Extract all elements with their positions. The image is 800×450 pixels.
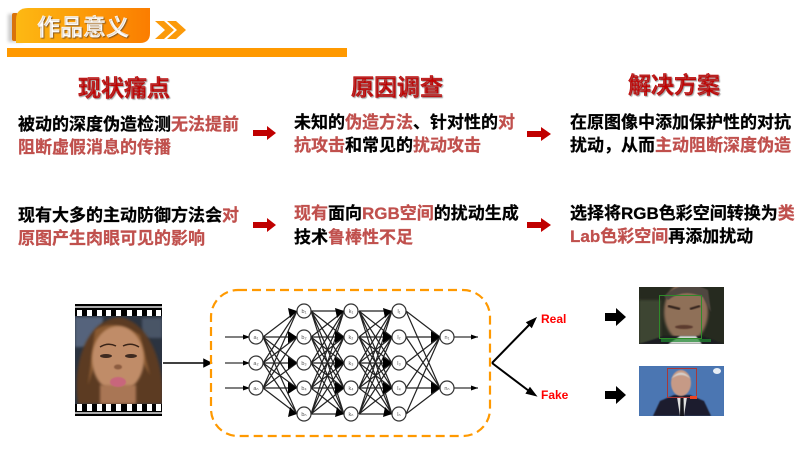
text: solution 2: 选择将RGB色彩空间转换为类 xyxy=(570,204,795,223)
text: solution 2: Lab色彩空间 xyxy=(570,226,668,246)
text: cause 2: 鲁棒性不足 xyxy=(328,227,413,247)
photo: real face with green box xyxy=(639,282,724,344)
neural network diagram: l₂ xyxy=(397,335,401,341)
neural network diagram: b₂ xyxy=(301,335,307,341)
heading: 现状痛点: 现状痛点 xyxy=(78,75,170,101)
neural network diagram: k₂ xyxy=(349,335,353,341)
text: solution 2: 再添加扰动 xyxy=(668,227,753,246)
neural network diagram: b₁ xyxy=(302,309,307,315)
arrow: row 1 left xyxy=(253,126,276,140)
arrow: row 2 right xyxy=(527,218,551,232)
neural network diagram: l₃ xyxy=(397,361,401,367)
text: cause 1: 和常见的扰动攻击 xyxy=(345,136,481,155)
text: pain point 2: 原图产生肉眼可见的影响 xyxy=(18,229,205,248)
text: cause 2: 现有面向RGB空间的扰动生成 xyxy=(294,204,519,223)
text: cause 2: 技术 xyxy=(294,228,328,247)
arrow: Real to photo xyxy=(605,308,626,326)
text: pain point 2: 现有大多的主动防御方法会对 xyxy=(18,206,239,225)
text: pain point 1: 被动的深度伪造检测无法提前 xyxy=(18,115,239,134)
neural network diagram xyxy=(225,304,478,421)
neural network diagram: bₙ xyxy=(301,412,307,418)
heading: 解决方案: 解决方案 xyxy=(628,72,720,98)
neural network diagram: b₄ xyxy=(301,386,307,392)
neural network diagram: kₙ xyxy=(349,412,354,418)
neural network diagram: l₁ xyxy=(397,309,401,315)
image: film strip with face xyxy=(75,304,163,416)
neural network diagram: l₄ xyxy=(397,386,401,392)
arrow: image to network xyxy=(163,360,211,366)
arrow: row 2 left xyxy=(253,218,276,232)
label: Fake: Fake xyxy=(541,388,569,402)
neural network diagram: aₙ xyxy=(253,386,259,392)
neural network diagram: a₁ xyxy=(254,335,259,341)
neural network diagram: k₁ xyxy=(349,309,353,315)
text: solution 1: 在原图像中添加保护性的对抗 xyxy=(570,113,791,132)
arrow: to Fake xyxy=(492,363,535,395)
section header: 作品意义: 作品意义 xyxy=(37,14,129,40)
photo: fake face with red box xyxy=(639,366,724,416)
neural network diagram: b₃ xyxy=(301,361,307,367)
neural network diagram: lₙ xyxy=(397,412,402,418)
text: solution 1: 扰动，从而 xyxy=(570,136,655,155)
neural network diagram: k₄ xyxy=(348,386,354,392)
section header: 作品意义 xyxy=(7,8,347,57)
text: solution 1: 主动阻断深度伪造 xyxy=(655,135,791,155)
arrow: row 1 right xyxy=(527,127,551,141)
neural network diagram: k₃ xyxy=(348,361,354,367)
neural network diagram: n₁ xyxy=(445,335,450,341)
text: cause 1: 抗攻击 xyxy=(294,135,345,155)
text: cause 1: 未知的伪造方法、针对性的对 xyxy=(294,113,515,132)
arrow: to Real xyxy=(492,319,535,363)
arrow: Fake to photo xyxy=(605,386,626,404)
text: pain point 1: 阻断虚假消息的传播 xyxy=(18,137,171,157)
label: Real: Real xyxy=(541,312,566,326)
dashed box xyxy=(211,290,490,436)
neural network diagram: a₂ xyxy=(253,361,259,367)
neural network diagram: nₙ xyxy=(444,386,450,392)
heading: 原因调查: 原因调查 xyxy=(351,74,443,100)
